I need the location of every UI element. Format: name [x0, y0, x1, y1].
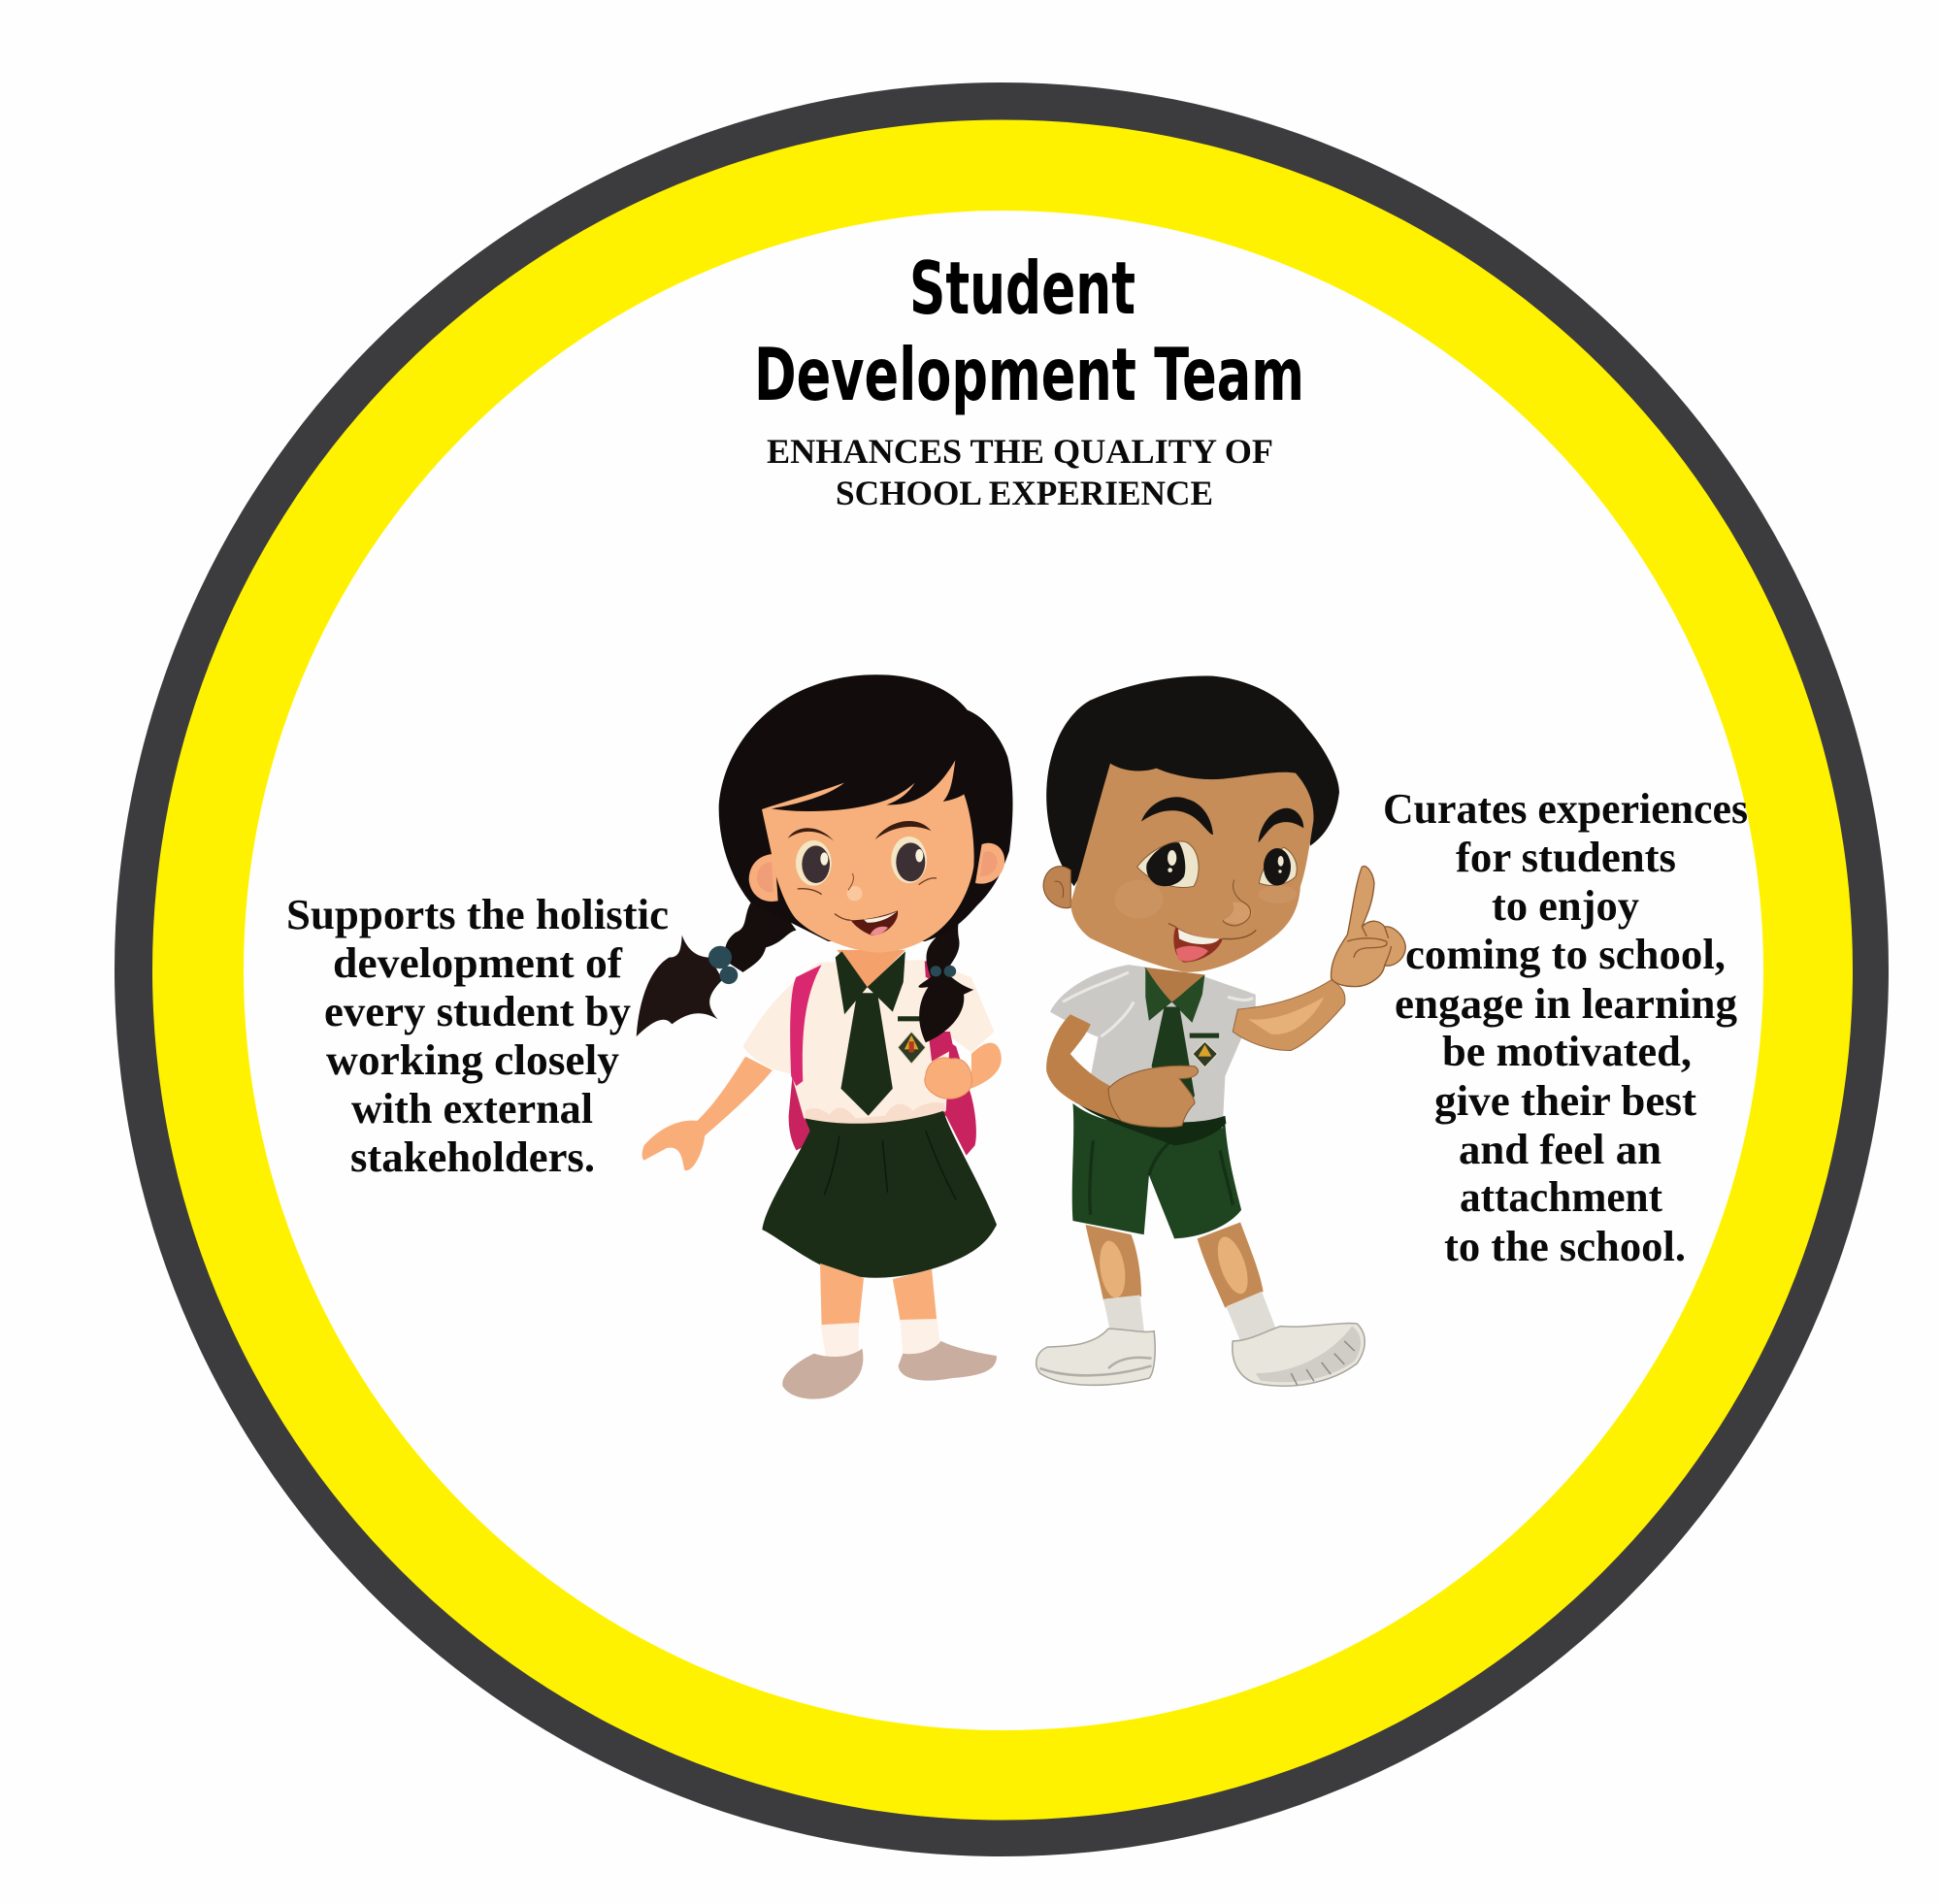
girl mouth [835, 910, 898, 936]
boy left shoe [1036, 1329, 1155, 1385]
boy ear [1043, 867, 1070, 908]
girl neck [837, 950, 905, 988]
left description text: Supports the holistic [286, 891, 669, 938]
girl badge [898, 1016, 926, 1064]
girl skirt [762, 1111, 997, 1278]
boy leg highlights [1097, 1233, 1254, 1299]
boy mouth [1168, 924, 1256, 963]
right description text: Curates experiences [1383, 785, 1748, 833]
boy hand on hip [1108, 1066, 1199, 1128]
boy belt [1071, 1096, 1226, 1145]
boy body [1036, 965, 1365, 1386]
subtitle: SCHOOL EXPERIENCE [836, 474, 1213, 512]
subtitle [767, 432, 1273, 512]
girl right strap [925, 960, 954, 1062]
girl head [719, 674, 1013, 953]
boy right shoe [1233, 1324, 1365, 1386]
left description text: development of [333, 939, 623, 987]
boy neck [1144, 968, 1204, 1002]
girl body [637, 888, 1002, 1399]
boy hair [1046, 676, 1339, 886]
boy nose [1223, 880, 1252, 926]
boy collar [1145, 968, 1204, 1023]
girl character [637, 674, 1013, 1399]
title: Development Team [754, 332, 1304, 417]
boy face [1070, 764, 1314, 972]
right description text: and feel an [1459, 1126, 1661, 1173]
boy legs [1086, 1222, 1264, 1308]
girl left ear [749, 854, 778, 902]
right description text: for students [1456, 834, 1676, 881]
left description text: every student by [324, 988, 631, 1035]
boy sleeve folds [1063, 972, 1253, 1036]
boy right eye [1259, 847, 1297, 886]
boy character [1036, 676, 1405, 1386]
boy badge [1190, 1034, 1219, 1067]
girl hair ties [708, 946, 956, 984]
boy right arm [1233, 979, 1345, 1051]
girl nose [847, 873, 863, 901]
boy left eye [1137, 841, 1199, 887]
boy tie [1152, 1007, 1195, 1111]
girl left eye [788, 828, 834, 895]
girl legs [820, 1264, 937, 1327]
girl left arm [642, 1057, 773, 1170]
girl backpack [789, 1027, 976, 1156]
girl shoes [782, 1341, 997, 1399]
girl shirt [743, 960, 994, 1124]
white inner panel [244, 211, 1763, 1730]
girl left strap [790, 965, 822, 1086]
boy shorts [1072, 1103, 1241, 1238]
boy socks [1103, 1292, 1276, 1341]
girl right ear [975, 843, 1004, 884]
title: Student [909, 246, 1135, 331]
right description text: coming to school, [1405, 931, 1726, 978]
boy shirt [1050, 965, 1256, 1129]
right description text: be motivated, [1442, 1028, 1692, 1075]
girl tie [840, 993, 893, 1116]
right description text [1383, 785, 1748, 1270]
girl collar [836, 951, 905, 1014]
girl left braid tail [637, 936, 723, 1036]
subtitle: ENHANCES THE QUALITY OF [767, 432, 1273, 471]
left description text [286, 891, 669, 1181]
boy head [1043, 676, 1405, 987]
boy left arm [1046, 1014, 1121, 1121]
right description text: attachment [1460, 1173, 1662, 1221]
girl right braid [918, 888, 973, 1042]
boy arm highlight [1248, 997, 1324, 1034]
girl face [762, 760, 974, 953]
left description text: working closely [326, 1036, 619, 1084]
girl left braid [720, 898, 796, 972]
boy cheeks [1114, 880, 1298, 919]
girl socks [821, 1319, 940, 1361]
boy eyebrows [1141, 797, 1303, 842]
right description text: give their best [1434, 1077, 1696, 1125]
girl right eye [875, 821, 937, 885]
girl right forearm [971, 1043, 1002, 1089]
title [754, 246, 1304, 417]
girl fist [925, 1058, 971, 1099]
left description text: stakeholders. [350, 1133, 595, 1181]
left description text: with external [351, 1085, 593, 1133]
right description text: engage in learning [1395, 980, 1737, 1028]
yellow ring [152, 120, 1853, 1821]
boy pointing hand [1331, 867, 1405, 987]
right description text: to enjoy [1492, 882, 1639, 930]
girl shirt shade [805, 1102, 945, 1125]
girl hair [719, 674, 1013, 941]
right description text: to the school. [1444, 1223, 1686, 1270]
